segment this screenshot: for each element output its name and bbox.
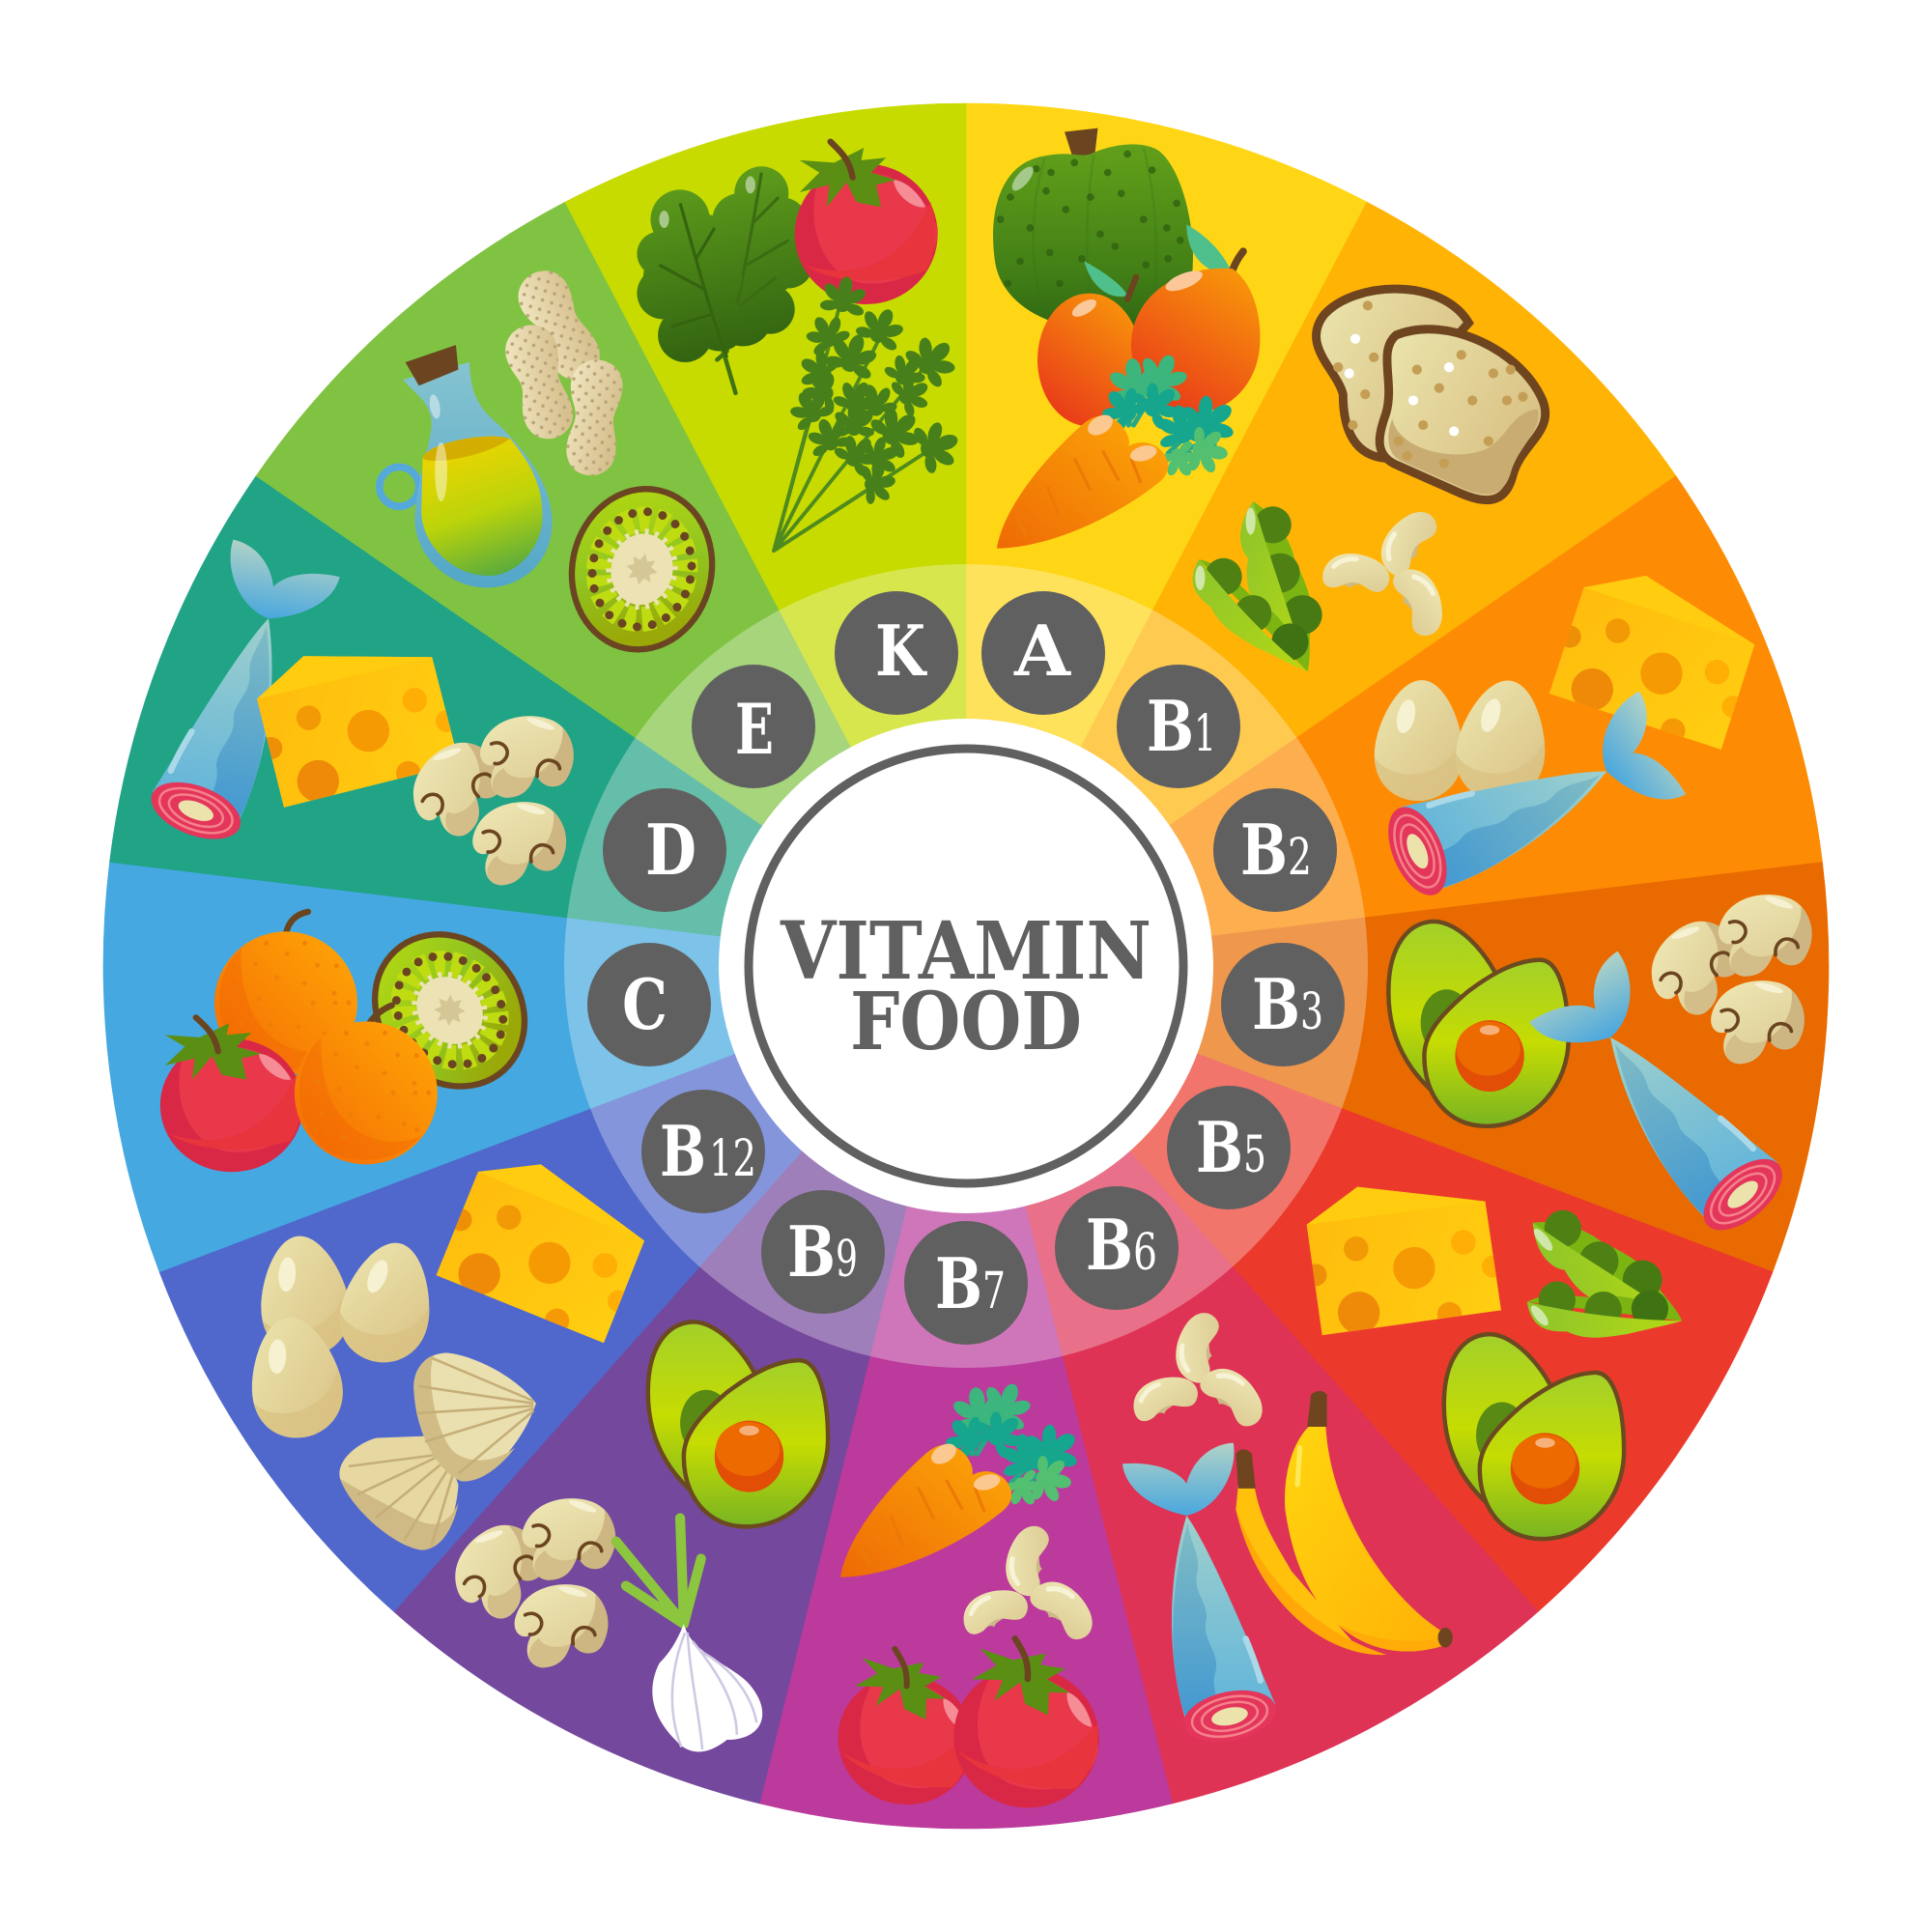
badge: B9 [761, 1190, 885, 1314]
icon: cheese [218, 595, 493, 863]
icon: cashews [964, 1520, 1099, 1652]
icon: kiwi [554, 472, 730, 667]
panel: vitamin K foods [637, 142, 966, 551]
badge: A [981, 591, 1105, 715]
badge: B2 [1213, 788, 1337, 912]
badge: K: K [875, 610, 927, 692]
badge: B3: B [1252, 963, 1300, 1045]
badge: A: A [1013, 610, 1071, 692]
icon: pea pods [1193, 501, 1322, 671]
panel: vitamin A foods [993, 128, 1260, 549]
icon: parsley [774, 272, 966, 551]
badge: B7 [904, 1221, 1028, 1345]
icon: cashews [1311, 477, 1491, 655]
icon: spinach [637, 166, 813, 393]
badge: B9: 9 [836, 1231, 858, 1289]
badge: B2: B [1240, 809, 1288, 891]
badge: B12: B [660, 1110, 706, 1192]
icon: fish [140, 532, 343, 860]
title [780, 905, 1151, 1068]
badge: B5 [1167, 1086, 1291, 1209]
icon: tomatoes [823, 1630, 1121, 1824]
badge: C [587, 943, 711, 1066]
badge: B1: B [1147, 685, 1194, 767]
icon: pumpkin [993, 128, 1193, 332]
badge: B7: B [935, 1242, 982, 1324]
icon: garlic [616, 1518, 762, 1751]
badge: B5: B [1196, 1106, 1243, 1188]
icon: fish [1360, 653, 1703, 958]
panel: vitamin B1 foods [1193, 289, 1546, 671]
panel: vitamin E foods [380, 262, 730, 667]
icon: fish [1122, 1443, 1281, 1750]
badge: B12: 12 [709, 1130, 756, 1188]
icon: fish [1520, 929, 1804, 1275]
badge: B6: B [1086, 1204, 1133, 1286]
panel: vitamin D foods [140, 532, 584, 900]
icon: cheese [1542, 569, 1762, 761]
icon: bread [1317, 289, 1546, 500]
badge: B5: 5 [1243, 1126, 1266, 1184]
icon: peanuts [499, 262, 625, 477]
panel: vitamin B6 foods [1122, 1306, 1453, 1750]
badge: B6: 6 [1133, 1224, 1157, 1282]
icon: shells [339, 1353, 536, 1550]
icon: eggs [242, 1232, 443, 1443]
panel: vitamin C foods [160, 899, 560, 1172]
icon: mushrooms [441, 1483, 627, 1683]
icon: carrot [997, 346, 1246, 549]
panel: vitamin B2 foods [1360, 569, 1762, 958]
icon: cashews [1134, 1306, 1269, 1438]
icon: tomato [795, 142, 938, 304]
badge: E [692, 665, 815, 788]
icon: avocado [1388, 922, 1569, 1126]
translucent ring [564, 564, 1368, 1368]
center white disc [719, 719, 1213, 1213]
badge: B6 [1055, 1186, 1179, 1310]
panel: vitamin B3 foods [1388, 879, 1823, 1275]
panel: vitamin B12 foods [242, 1164, 644, 1550]
panel: vitamin B7 foods [823, 1375, 1121, 1824]
badge: K [835, 591, 958, 715]
icon: mushrooms [1637, 879, 1823, 1079]
title: FOOD [850, 976, 1082, 1068]
icon: kiwi [340, 899, 560, 1122]
icon: avocado [648, 1321, 828, 1526]
icon: mushrooms [400, 700, 584, 900]
center ring [749, 749, 1183, 1183]
badge: B1: 1 [1194, 705, 1216, 763]
panel: vitamin B9 foods [441, 1321, 828, 1751]
badge: D: D [645, 809, 696, 891]
icon: oranges and tomato [160, 912, 438, 1172]
badge: B3: 3 [1300, 983, 1323, 1041]
icon: bananas [1236, 1391, 1453, 1655]
food illustrations [140, 128, 1823, 1824]
icon: eggs [1372, 674, 1554, 807]
badge: D [603, 788, 726, 912]
color wheel [103, 103, 1829, 1829]
title: VITAMIN [780, 905, 1151, 998]
icon: cheese [437, 1164, 644, 1343]
badge: B1 [1117, 665, 1240, 788]
badge: B7: 7 [982, 1263, 1006, 1321]
icon: mangoes [1037, 224, 1260, 426]
icon: avocado [1444, 1334, 1624, 1539]
badge: B2: 2 [1288, 829, 1312, 887]
badge: B9: B [787, 1210, 836, 1293]
badge: E: E [735, 688, 774, 770]
badge: B3 [1221, 943, 1345, 1066]
icon: pea pods [1486, 1179, 1693, 1393]
icon: oil bottle [380, 345, 553, 587]
badge: C: C [622, 963, 668, 1045]
badge: B12 [641, 1090, 765, 1213]
icon: cheese [1266, 1135, 1536, 1394]
panel: vitamin B5 foods [1266, 1135, 1693, 1539]
icon: carrot [840, 1375, 1090, 1577]
